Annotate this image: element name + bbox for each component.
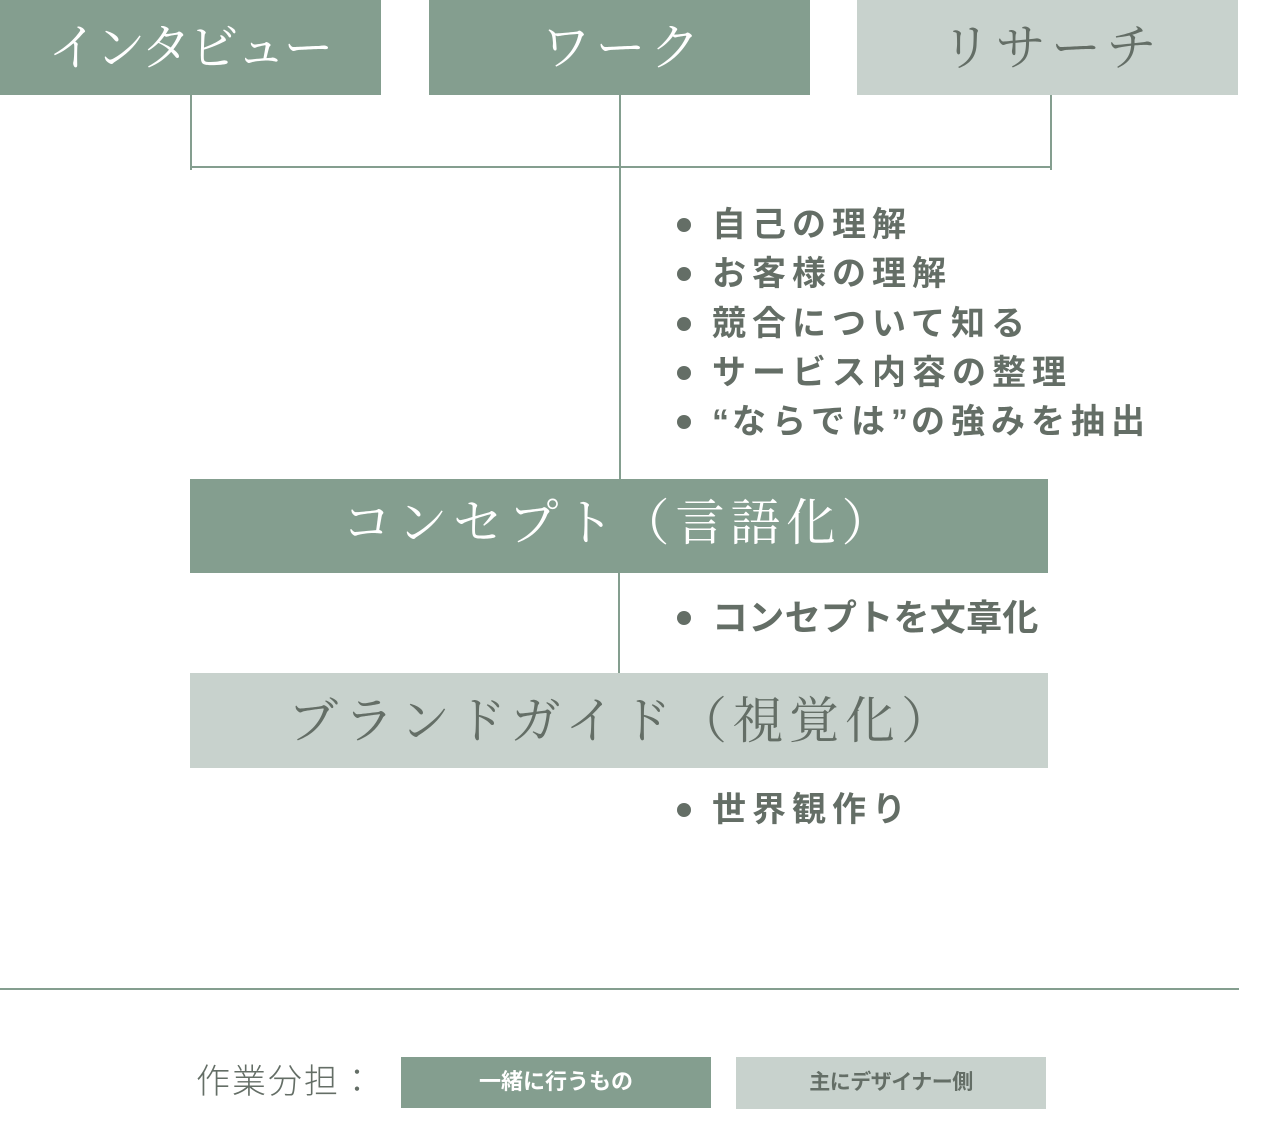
box: work: ワーク	[541, 20, 704, 76]
list: brand guide item: 世界観作り	[712, 791, 912, 829]
connector: concept to brand guide	[618, 573, 620, 673]
box: brand guide	[190, 673, 1048, 768]
list: work items: 競合について知る	[712, 305, 1031, 343]
box: interview	[0, 0, 381, 95]
legend: together	[401, 1057, 711, 1108]
legend label: 作業分担：	[196, 1063, 376, 1101]
box: brand guide: ブランドガイド（視覚化）	[288, 693, 957, 749]
box: concept: コンセプト（言語化）	[342, 495, 897, 551]
list: work items	[677, 206, 1151, 441]
list: work items: 自己の理解	[712, 206, 912, 244]
box: research	[857, 0, 1238, 95]
connector: bracket joining top boxes	[190, 95, 1052, 479]
box: research: リサーチ	[941, 20, 1162, 76]
box: work	[429, 0, 810, 95]
list: work items: サービス内容の整理	[712, 354, 1072, 392]
box: interview: インタビュー	[48, 20, 331, 76]
list: work items: お客様の理解	[712, 255, 952, 293]
divider	[0, 988, 1239, 990]
legend: designer	[736, 1057, 1046, 1109]
box: concept	[190, 479, 1048, 573]
list: concept item: コンセプトを文章化	[712, 597, 1039, 638]
list: work items: “ならでは”の強みを抽出	[712, 403, 1151, 441]
legend: together: 一緒に行うもの	[479, 1069, 633, 1094]
legend: designer: 主にデザイナー側	[809, 1071, 973, 1094]
